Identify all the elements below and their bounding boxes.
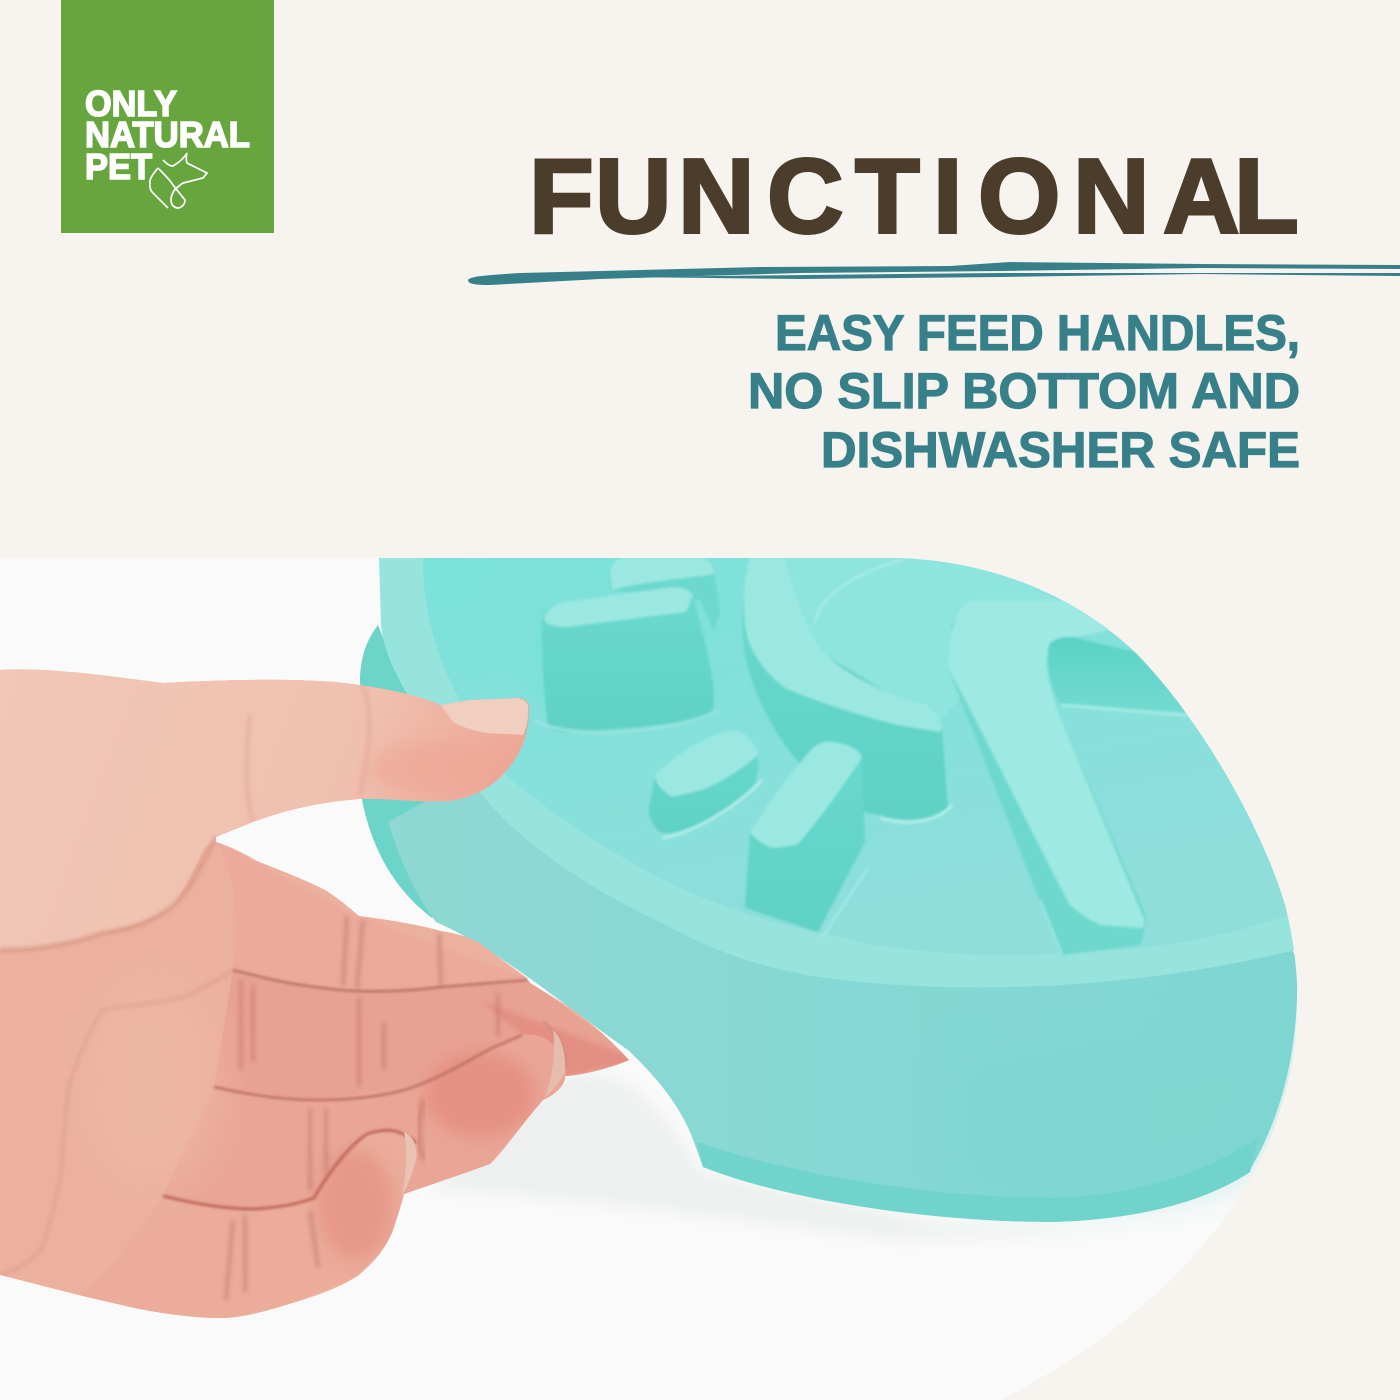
subtitle: NO SLIP BOTTOM AND <box>748 363 1300 419</box>
logo wordmark <box>85 83 250 187</box>
thumb tip flush <box>374 748 443 786</box>
rear small block <box>610 558 720 632</box>
thumb crease <box>247 684 369 822</box>
icon: slow feeder bowl <box>360 558 1297 1222</box>
logo wordmark: ONLY <box>85 83 177 124</box>
hand base <box>0 660 640 1330</box>
subtitle: EASY FEED HANDLES, <box>775 305 1300 361</box>
large square block <box>535 587 720 732</box>
disc inside curved ridge <box>785 558 1058 720</box>
rear trough shade <box>489 558 610 700</box>
logo wordmark: PET <box>85 146 152 187</box>
bowl basin floor <box>423 558 1289 955</box>
long straight ridge <box>948 600 1147 955</box>
middle finger <box>214 970 640 1100</box>
inner disc edge shade <box>815 560 904 622</box>
panel: product photo <box>0 558 1400 1400</box>
subtitle <box>748 305 1300 478</box>
ring finger <box>163 1035 566 1209</box>
pinky fingernail <box>402 1132 416 1196</box>
ring fingernail <box>545 1030 565 1098</box>
icon: dog and cat outline <box>150 153 207 208</box>
icon: hand <box>0 660 640 1330</box>
small pill block <box>649 731 758 833</box>
thumbnail <box>441 697 529 735</box>
pocket lip highlight <box>1061 705 1197 716</box>
main creases <box>0 837 216 950</box>
table shadow <box>448 1076 942 1236</box>
curved ridge <box>743 558 948 820</box>
short tall block <box>745 741 865 932</box>
subtitle: DISHWASHER SAFE <box>821 422 1300 478</box>
logo <box>61 0 274 233</box>
bowl outer wall <box>388 760 1297 1222</box>
title: FUNCTIONAL <box>529 138 1299 256</box>
brush stroke divider <box>468 262 1400 285</box>
bowl rim <box>379 558 1296 987</box>
thumb mound <box>0 665 530 950</box>
pocket behind long ridge <box>1048 637 1197 715</box>
joint creases <box>226 916 498 1300</box>
bowl back sliver <box>360 625 432 918</box>
logo wordmark: NATURAL <box>85 114 250 155</box>
palm shade <box>176 1078 216 1170</box>
bowl wall shade <box>1050 997 1298 1223</box>
pinky finger <box>81 1194 404 1318</box>
bowl base lip <box>697 1138 1258 1222</box>
floor details <box>822 868 1062 955</box>
index finger <box>359 916 360 917</box>
